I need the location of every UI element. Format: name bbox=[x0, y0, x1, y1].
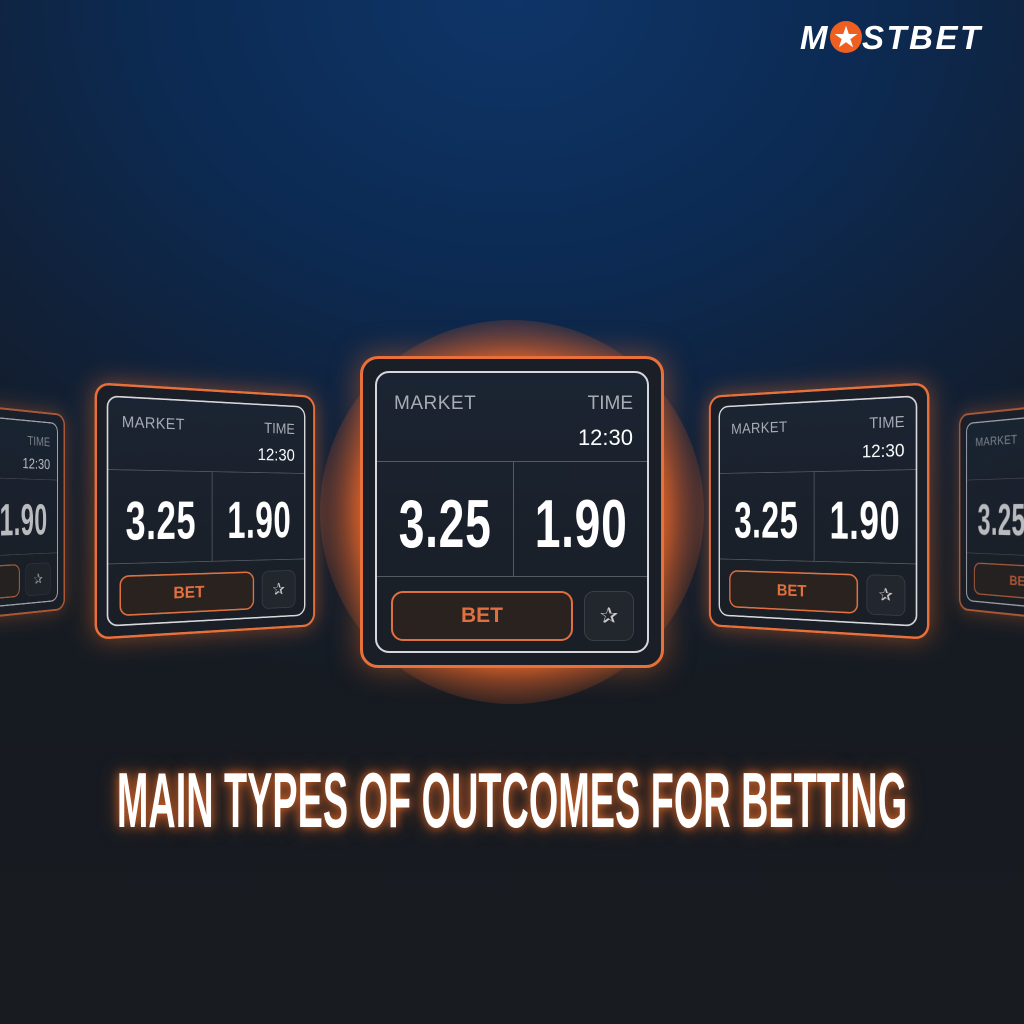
card: center: 12:30 bbox=[578, 425, 633, 450]
card: right: TIME bbox=[869, 414, 905, 432]
card: left: 12:30 bbox=[258, 445, 295, 465]
card: right: MARKET bbox=[731, 419, 787, 438]
card: right: BET bbox=[777, 581, 807, 600]
card: far left: 1.90 bbox=[0, 495, 47, 546]
card: center: ✰ bbox=[600, 603, 618, 628]
card: left: TIME bbox=[264, 421, 295, 438]
card: right: 1.90 bbox=[830, 490, 900, 552]
card: center: 1.90 bbox=[535, 486, 627, 562]
card: right: 3.25 bbox=[734, 491, 798, 550]
card: center: BET bbox=[461, 604, 503, 627]
glow behind center card bbox=[320, 320, 704, 704]
card: far right bbox=[959, 396, 1024, 628]
card: center: TIME bbox=[588, 393, 633, 414]
card: far right: MARKET bbox=[975, 433, 1017, 449]
card: left: 1.90 bbox=[227, 491, 291, 550]
card: right bbox=[709, 382, 929, 640]
card: far left: TIME bbox=[27, 434, 50, 450]
card: center: 3.25 bbox=[399, 486, 491, 562]
card: left bbox=[95, 382, 315, 640]
card: center bbox=[360, 356, 664, 668]
logo: M STBET bbox=[800, 19, 983, 56]
card: far left: ✰ bbox=[34, 570, 43, 587]
card: left: BET bbox=[173, 583, 204, 602]
card: far left bbox=[0, 396, 65, 628]
card: far left: 12:30 bbox=[22, 455, 50, 473]
card: left: MARKET bbox=[122, 414, 185, 434]
title: MAIN TYPES OF OUTCOMES FOR BETTING bbox=[117, 756, 907, 844]
logo: ★ bbox=[834, 22, 858, 52]
card: left: 3.25 bbox=[126, 490, 196, 552]
card: right: ✰ bbox=[879, 584, 893, 605]
card: center: MARKET bbox=[394, 393, 476, 414]
card: left: ✰ bbox=[273, 579, 285, 599]
card: right: 12:30 bbox=[862, 440, 905, 461]
